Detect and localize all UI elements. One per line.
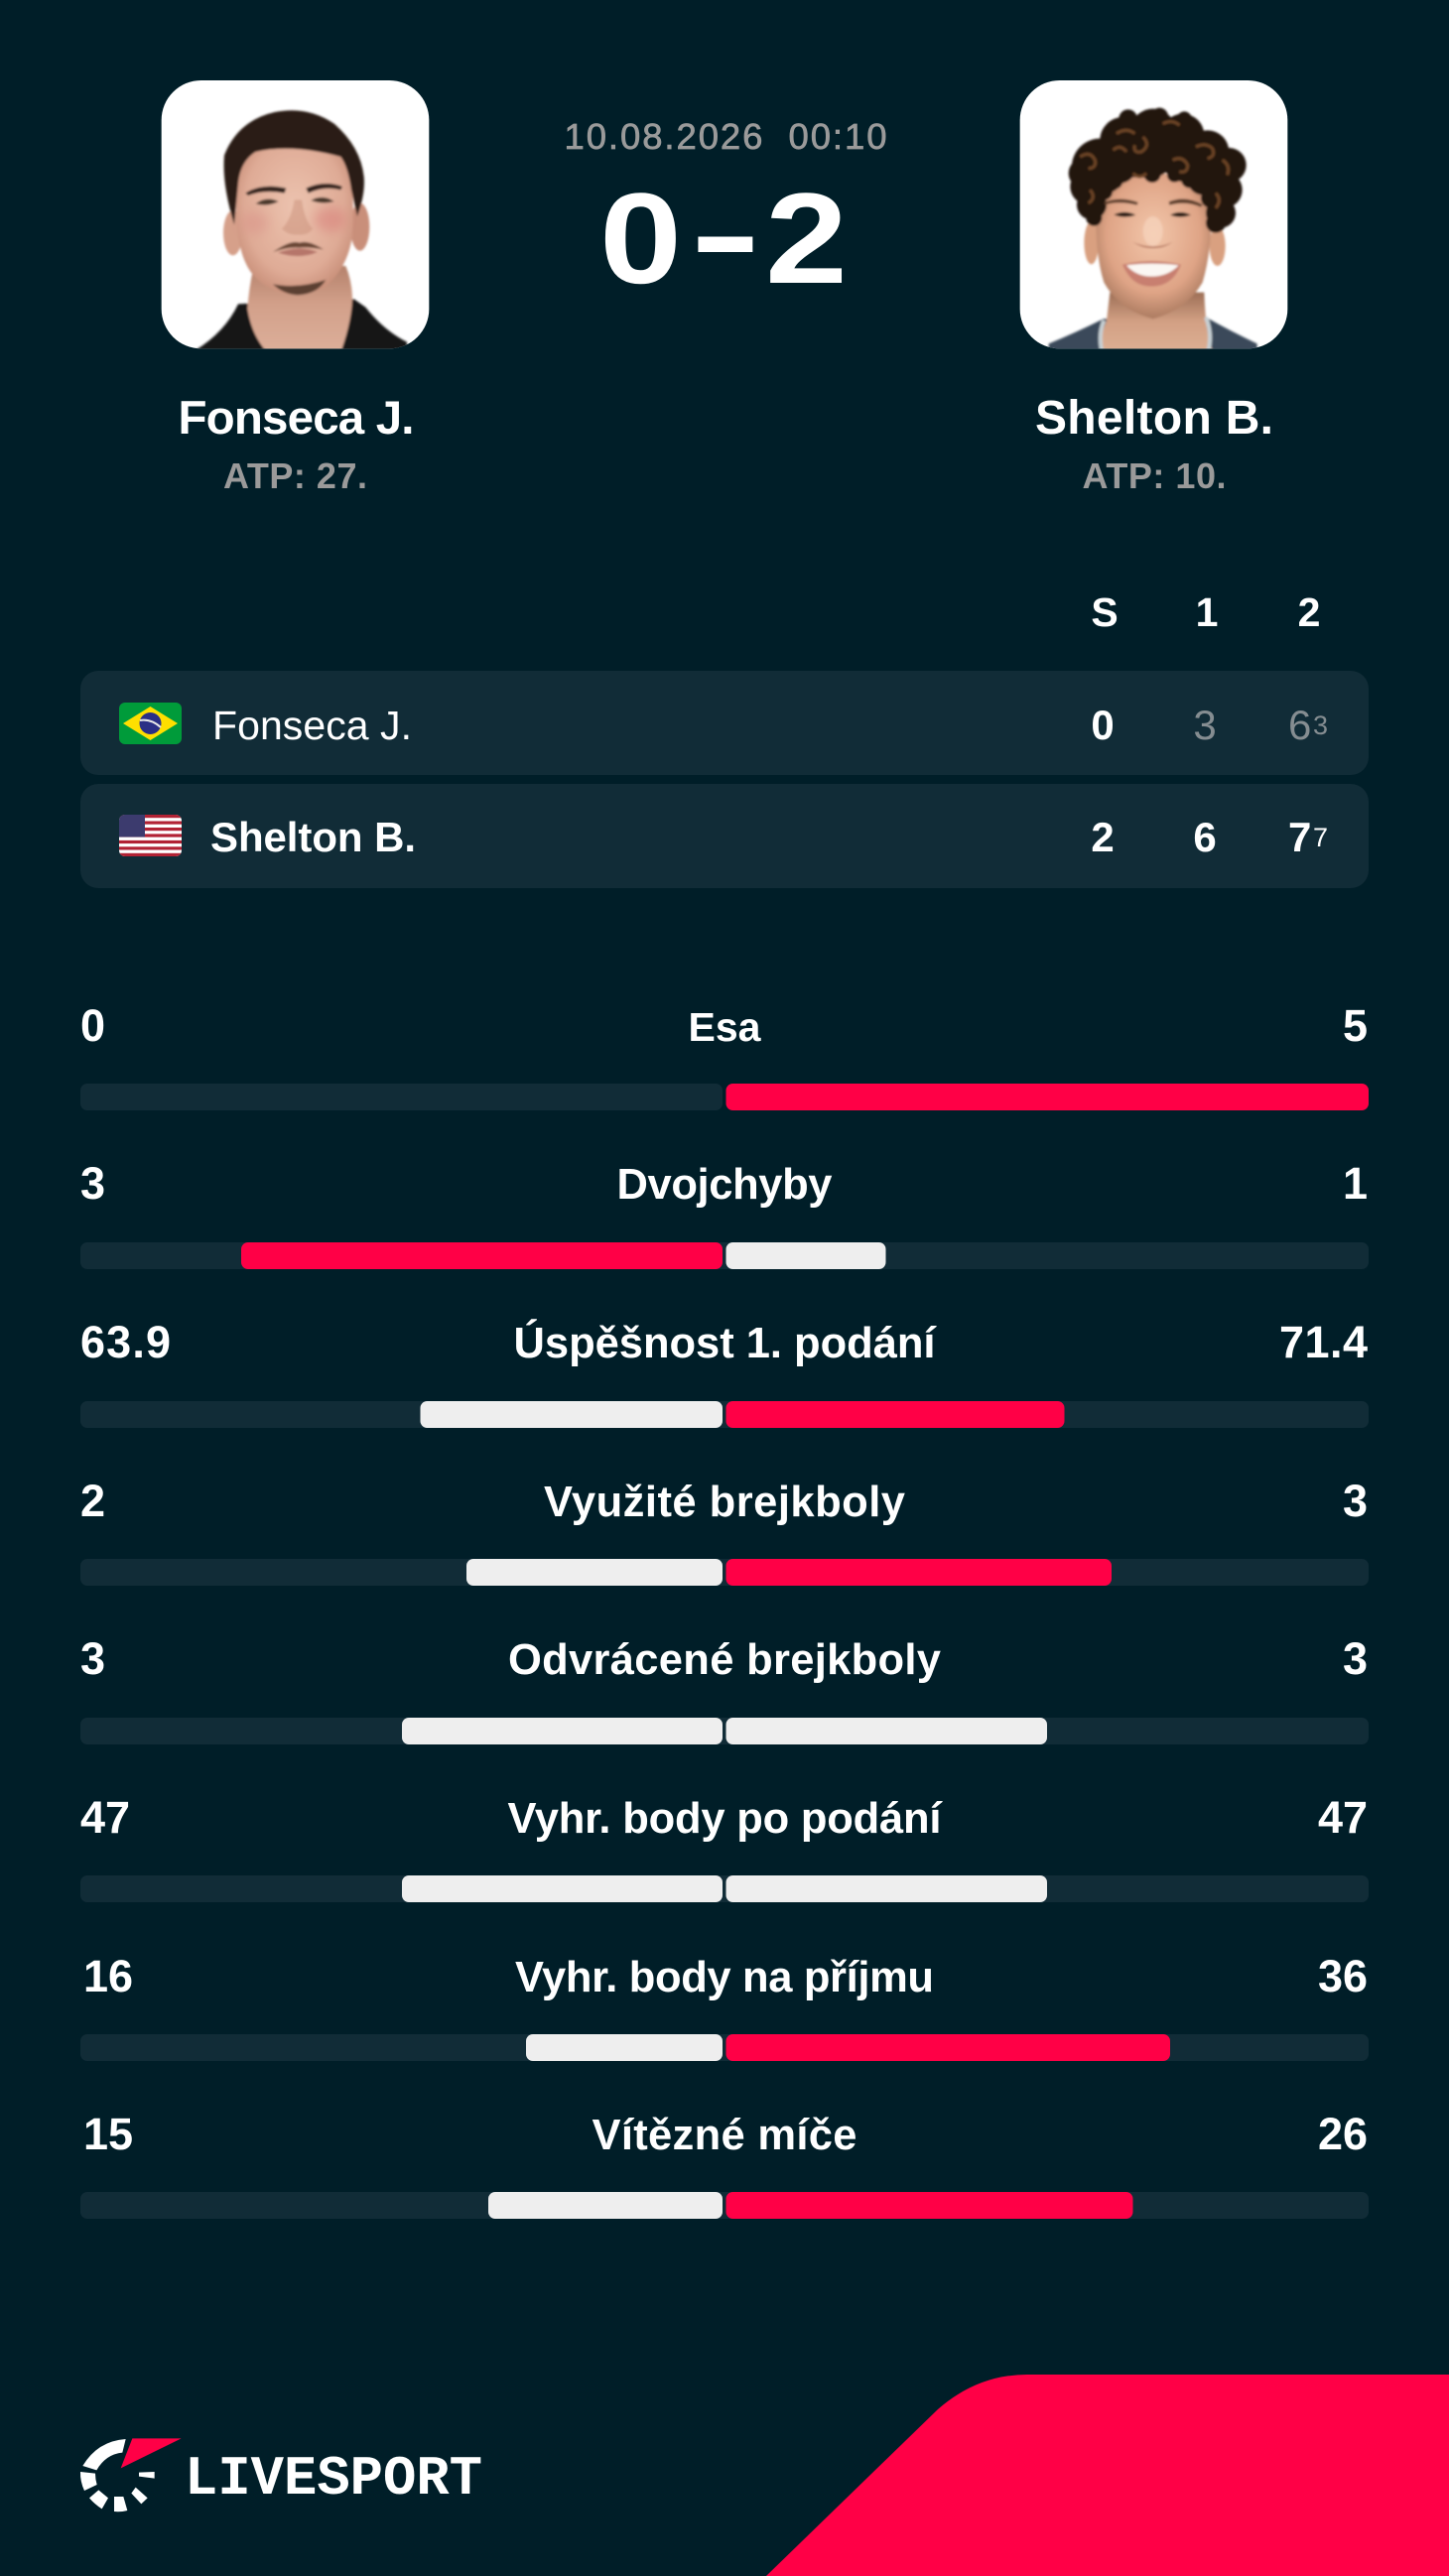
set table header: 1 — [1196, 589, 1218, 635]
final score: - — [690, 161, 761, 306]
decorative corner shape — [766, 2375, 1449, 2576]
score row: Fonseca: 0 — [1091, 702, 1115, 748]
score row: Shelton: Shelton B. — [210, 814, 416, 860]
final score: 0 — [599, 166, 682, 311]
stat: Úspěšnost 1. podání — [80, 1317, 1369, 1428]
stat: Vyhr. body na příjmu: 16 — [83, 1951, 133, 2001]
stat: Dvojchyby: Dvojchyby — [617, 1161, 832, 1209]
ranking: Fonseca: ATP: 27. — [223, 455, 367, 496]
stat: Dvojchyby: 1 — [1343, 1158, 1368, 1209]
score row: Fonseca: Fonseca J. — [212, 703, 412, 748]
stat: Vyhr. body na příjmu: Vyhr. body na příjmu — [515, 1954, 934, 2001]
stat: Dvojchyby — [80, 1158, 1369, 1269]
stat: Vyhr. body na příjmu — [80, 1951, 1369, 2061]
match date and time: 10.08.2026 00:10 — [564, 116, 887, 157]
stat: Využité brejkboly: Využité brejkboly — [544, 1479, 905, 1526]
stat: Vítězné míče: 26 — [1318, 2109, 1368, 2159]
stat: Využité brejkboly: 3 — [1343, 1476, 1368, 1526]
stat: Využité brejkboly — [80, 1476, 1369, 1586]
score row: Shelton: 2 — [1091, 814, 1115, 860]
set table header: S — [1091, 589, 1119, 635]
logo: Livesport: LIVESPORT — [185, 2447, 482, 2511]
player photo: Fonseca — [162, 80, 429, 350]
score row: Fonseca: 6 — [1288, 702, 1311, 748]
score row: Fonseca: 3 — [1193, 702, 1217, 748]
stat: Vyhr. body po podání: 47 — [80, 1792, 130, 1843]
stat: Esa: Esa — [689, 1004, 762, 1050]
stat: Odvrácené brejkboly: 3 — [80, 1633, 105, 1684]
set table header — [1091, 589, 1320, 635]
flag: Brazil — [119, 703, 182, 744]
stat: Vyhr. body na příjmu: 36 — [1318, 1951, 1368, 2001]
score row: Shelton: 7 — [1288, 814, 1311, 860]
stat: Vyhr. body po podání: 47 — [1318, 1792, 1368, 1843]
set table header: 2 — [1298, 589, 1320, 635]
score row: Shelton: 6 — [1193, 814, 1217, 860]
icon: Livesport mark — [80, 2438, 182, 2512]
score row: Shelton — [80, 784, 1369, 888]
stat: Esa: 5 — [1343, 1000, 1368, 1051]
stat: Odvrácené brejkboly: Odvrácené brejkboly — [508, 1636, 941, 1684]
ranking: Shelton: ATP: 10. — [1082, 455, 1227, 496]
stat: Vítězné míče: Vítězné míče — [592, 2112, 857, 2159]
player name: Fonseca: Fonseca J. — [179, 392, 415, 445]
stat: Využité brejkboly: 2 — [80, 1476, 105, 1526]
stat: Vyhr. body po podání: Vyhr. body po podání — [508, 1795, 943, 1843]
stat: Úspěšnost 1. podání: Úspěšnost 1. podání — [514, 1318, 937, 1367]
final score: 2 — [765, 166, 848, 311]
stat: Esa: 0 — [80, 1000, 105, 1051]
score row: Fonseca: 3 — [1313, 710, 1328, 740]
stat: Odvrácené brejkboly — [80, 1633, 1369, 1744]
player name: Shelton: Shelton B. — [1035, 392, 1273, 445]
score row: Shelton: 7 — [1313, 823, 1328, 852]
stat: Dvojchyby: 3 — [80, 1158, 105, 1209]
score row: Fonseca — [80, 671, 1369, 775]
stat: Esa — [80, 1000, 1369, 1110]
stat: Úspěšnost 1. podání: 71.4 — [1279, 1317, 1368, 1367]
player photo: Shelton — [1020, 80, 1287, 350]
logo: Livesport — [80, 2438, 482, 2512]
flag: USA — [119, 815, 182, 856]
stat: Odvrácené brejkboly: 3 — [1343, 1633, 1368, 1684]
stat: Úspěšnost 1. podání: 63.9 — [80, 1317, 171, 1367]
stat: Vyhr. body po podání — [80, 1792, 1369, 1902]
stat: Vítězné míče: 15 — [83, 2109, 133, 2159]
stat: Vítězné míče — [80, 2109, 1369, 2219]
final score — [599, 161, 848, 311]
